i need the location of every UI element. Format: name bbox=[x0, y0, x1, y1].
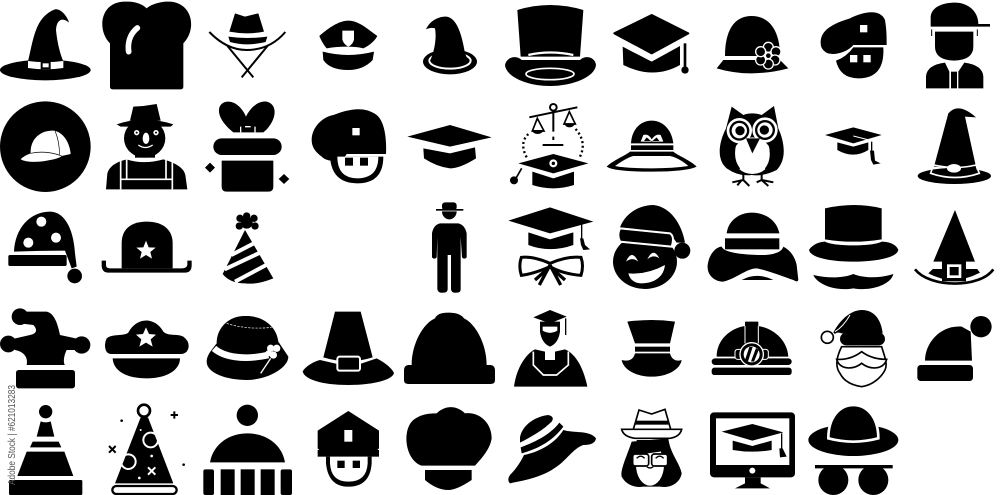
icon: man with cap bbox=[926, 3, 990, 88]
icon: tall top hat bbox=[622, 320, 682, 377]
icon: small graduation cap bbox=[825, 127, 882, 165]
icon: santa face bbox=[821, 310, 887, 387]
icon: wide-brim hat wavy bbox=[708, 213, 798, 282]
icon: bobble hat bbox=[203, 405, 292, 495]
icon: graduation cap bbox=[407, 125, 492, 168]
icon: baseball cap in circle bbox=[0, 101, 91, 192]
watermark credit text: Adobe Stock | #621013283 bbox=[6, 385, 18, 485]
icon: witch hat with buckle bbox=[915, 210, 993, 284]
icon: officer cap with star bbox=[105, 321, 189, 378]
icon: pilgrim hat bbox=[303, 312, 394, 385]
icon: cowboy hat with strap bbox=[209, 13, 285, 77]
icon: striped cone hat bbox=[9, 405, 82, 495]
icon: beret soldier face bbox=[312, 109, 386, 183]
icon: graduation cap with diploma bbox=[508, 207, 593, 285]
icon: hat and sunglasses bbox=[808, 405, 898, 495]
icon: floppy hat bbox=[508, 415, 596, 483]
icon: small wizard hat bbox=[423, 17, 477, 74]
icon: beanie hat bbox=[404, 313, 495, 384]
icon: monitor with graduation cap bbox=[710, 412, 795, 488]
icon: owl with glasses bbox=[720, 106, 784, 186]
icon: chef hat bbox=[406, 407, 492, 490]
icon: cloche hat with flower bbox=[717, 16, 788, 73]
icon: hat with clover bbox=[207, 316, 288, 380]
icon: top hat with bow bbox=[205, 101, 289, 192]
icon: police face bbox=[318, 411, 379, 487]
icon: scales of justice with graduation cap bbox=[510, 104, 588, 188]
icon: police cap bbox=[319, 21, 377, 70]
icon: santa hat bbox=[917, 316, 992, 381]
icon: graduation cap with tassel bbox=[614, 15, 689, 74]
icon: jester hat bbox=[0, 308, 90, 388]
icon: bread-shaped chef hat bbox=[102, 2, 191, 89]
icon: top hat and moustache bbox=[809, 205, 898, 289]
icon: party hat with confetti bbox=[109, 405, 185, 494]
icon: miner helmet bbox=[712, 322, 792, 375]
icon: bowler hat with star bbox=[102, 222, 192, 273]
icon: santa hat with snowflakes bbox=[8, 212, 82, 283]
icon: witch hat bbox=[0, 9, 91, 80]
icon: farmer bbox=[106, 104, 187, 189]
icon: graduate bbox=[514, 310, 587, 387]
icon: party hat bbox=[223, 212, 273, 284]
icon: sun hat with bow bbox=[607, 121, 697, 172]
icon: woman with hat and glasses bbox=[621, 409, 682, 487]
icon: tall wizard hat bbox=[918, 108, 991, 184]
icon: standing man with hat bbox=[432, 202, 467, 293]
icon: top hat bbox=[505, 5, 596, 86]
icon: beret face side bbox=[821, 12, 887, 78]
icon: smiling santa bbox=[613, 205, 690, 289]
